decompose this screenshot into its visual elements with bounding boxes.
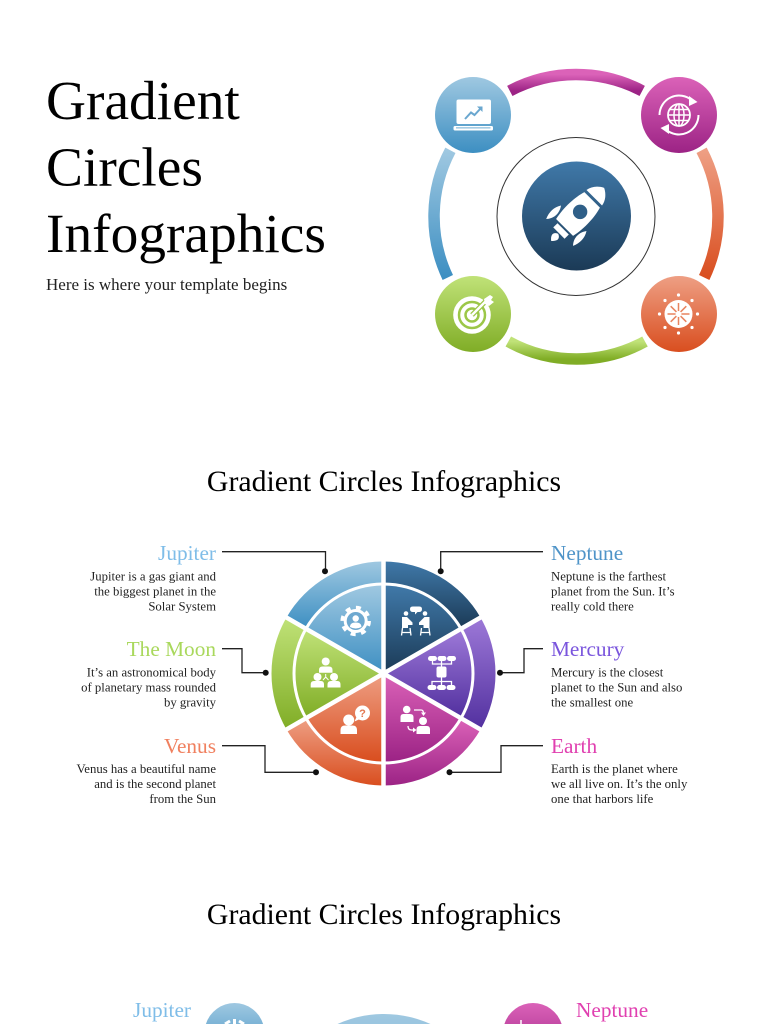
bottom label: Neptune: Neptune <box>576 998 648 1022</box>
wheel chart <box>271 558 496 789</box>
icon: rocket <box>536 173 619 256</box>
callout: Jupiter: Solar System <box>148 600 216 614</box>
callout: Jupiter: the biggest planet in the <box>94 584 216 598</box>
callout: Mercury: planet to the Sun and also <box>551 680 682 694</box>
title: Gradient <box>46 70 240 131</box>
bottom circle: center <box>338 1014 430 1024</box>
segment: Mercury <box>384 618 496 730</box>
title <box>46 70 326 264</box>
callout: Earth: we all live on. It’s the only <box>551 777 688 791</box>
icon circle: ship wheel <box>641 276 717 352</box>
callout: Earth: one that harbors life <box>551 792 654 806</box>
callout: Neptune <box>438 541 675 614</box>
ring <box>497 138 655 296</box>
callout: Venus: from the Sun <box>149 792 217 806</box>
bottom circle: right <box>504 1003 562 1024</box>
callout: Neptune: Neptune is the farthest <box>551 570 667 584</box>
callout: The Moon: of planetary mass rounded <box>81 680 217 694</box>
callout: Earth: Earth is the planet where <box>551 762 678 776</box>
title: Circles <box>46 136 203 198</box>
title: Infographics <box>46 203 326 264</box>
segment: Jupiter <box>286 562 384 674</box>
callout: Neptune: really cold there <box>551 600 634 614</box>
icon: group of people <box>311 658 340 688</box>
callout: Mercury <box>497 637 682 710</box>
section heading: Gradient Circles Infographics <box>207 465 561 498</box>
segment: Venus <box>286 674 384 786</box>
arc: bottom <box>508 342 645 359</box>
icon: exchange people <box>400 706 430 734</box>
bottom circle: left <box>206 1003 263 1024</box>
icon: meeting <box>402 606 430 636</box>
subtitle: Here is where your template begins <box>46 275 287 294</box>
callout: Mercury: Mercury is the closest <box>551 666 664 680</box>
callout: Mercury: the smallest one <box>551 696 633 710</box>
icon: person with question <box>340 706 370 734</box>
callout: Venus: and is the second planet <box>94 777 216 791</box>
callout: Jupiter <box>90 541 328 614</box>
section heading 2: Gradient Circles Infographics <box>207 898 561 931</box>
arc: top <box>510 75 642 91</box>
callout: Mercury: Mercury <box>551 637 625 661</box>
bottom label: Jupiter: Jupiter <box>133 998 191 1022</box>
callout: Venus <box>76 734 319 806</box>
callout: Earth <box>446 734 688 806</box>
segment: Earth <box>384 674 480 786</box>
callout: Neptune: Neptune <box>551 541 623 565</box>
callout: The Moon: by gravity <box>164 696 217 710</box>
arc: left <box>434 150 450 278</box>
segment: The Moon <box>271 618 384 730</box>
segment: Neptune <box>384 562 480 674</box>
icon: gear person <box>342 608 369 634</box>
arc: right <box>702 150 718 278</box>
callout: Neptune: planet from the Sun. It’s <box>551 584 675 598</box>
callout: Venus: Venus has a beautiful name <box>76 762 216 776</box>
icon: person with question: ? <box>359 708 366 720</box>
icon circle: target <box>435 276 511 352</box>
center circle <box>522 162 631 270</box>
callout: The Moon: It’s an astronomical body <box>87 666 217 680</box>
callout: The Moon <box>81 637 269 710</box>
callout: Earth: Earth <box>551 734 597 758</box>
callout: The Moon: The Moon <box>127 637 216 661</box>
icon circle: globe <box>641 77 717 153</box>
callout: Jupiter: Jupiter is a gas giant and <box>90 570 217 584</box>
icon circle: laptop <box>435 77 511 153</box>
diagram: rocket cycle <box>434 75 718 359</box>
callout: Venus: Venus <box>164 734 216 758</box>
icon: flow chart <box>428 656 456 690</box>
callout: Jupiter: Jupiter <box>158 541 216 565</box>
